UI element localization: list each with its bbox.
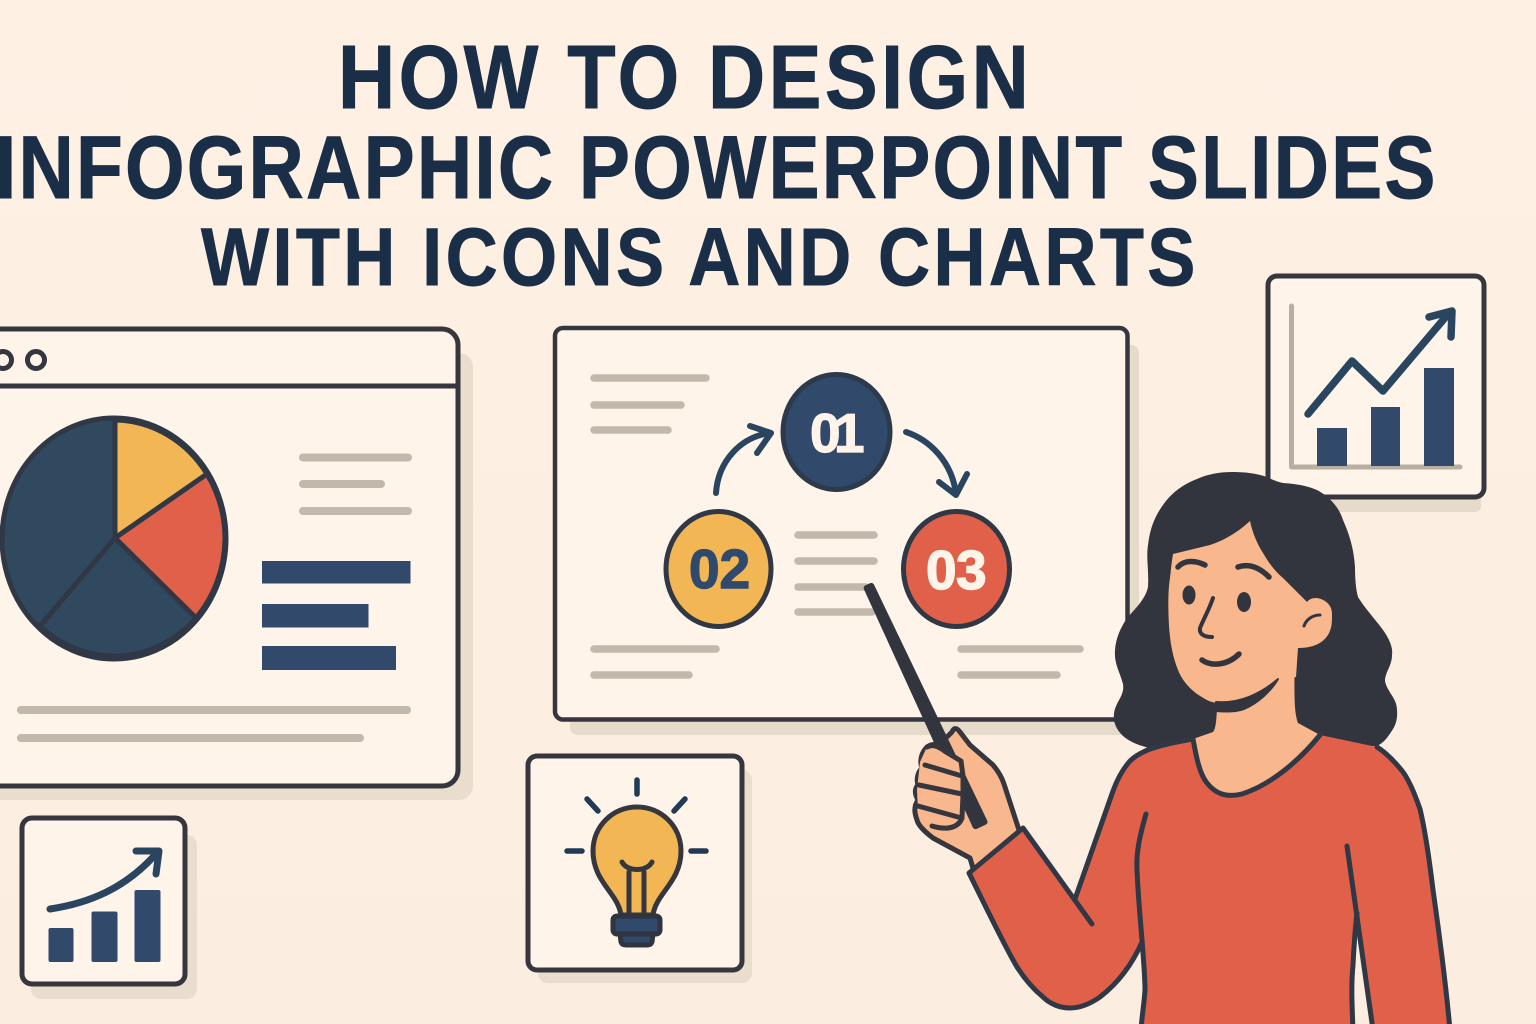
- text lines bottom left: [594, 649, 716, 675]
- growth arrow: [50, 851, 159, 909]
- sleeve outline: [969, 828, 1142, 1008]
- facial features: [1178, 561, 1320, 664]
- hand: [915, 729, 1025, 875]
- trend arrow: [1308, 311, 1452, 414]
- title line 1: HOW TO DESIGN: [338, 26, 1029, 127]
- step 03: 03: [926, 539, 987, 601]
- panel: browser window with pie chart: [0, 329, 473, 800]
- title line 2: INFOGRAPHIC POWERPOINT SLIDES: [0, 118, 1435, 217]
- panel: top right chart: [1268, 276, 1484, 512]
- chart bars: [1317, 368, 1454, 466]
- panel: light bulb: [528, 756, 752, 983]
- pointer stick: [867, 586, 984, 826]
- panel: central process slide: [555, 328, 1139, 735]
- chart axes: [1292, 306, 1460, 467]
- pie chart: [2, 418, 226, 659]
- bulb rays: [567, 780, 706, 851]
- text lines top left: [594, 378, 706, 430]
- horizontal bars: [262, 561, 410, 670]
- fingers: [917, 746, 963, 829]
- window dots: [0, 352, 44, 368]
- step 02: [666, 512, 771, 626]
- panel: small growth chart: [22, 818, 197, 999]
- caption lines: [21, 710, 407, 738]
- face: [1168, 521, 1332, 703]
- bulb base: [613, 916, 660, 934]
- step 02: 02: [689, 538, 750, 600]
- bars: [48, 890, 160, 962]
- bulb glass: [593, 807, 681, 915]
- clothing outlines: [1075, 735, 1450, 1024]
- text lines centre: [798, 535, 874, 612]
- legend text lines: [303, 458, 408, 511]
- chin shadow: [1216, 679, 1278, 712]
- hair: [1114, 472, 1397, 748]
- step 01: 01: [810, 402, 865, 464]
- presenter figure: [867, 472, 1450, 1024]
- step 01: [783, 374, 890, 490]
- arrow from 02 to 01: [716, 426, 771, 493]
- title line 3: WITH ICONS AND CHARTS: [201, 212, 1195, 303]
- torso and right arm: [1075, 735, 1450, 1024]
- text lines bottom right: [961, 649, 1080, 675]
- step 03: [904, 512, 1010, 626]
- title: [0, 26, 1435, 303]
- arrow from 01 to 03: [906, 432, 967, 495]
- neck and chest: [1193, 650, 1320, 795]
- filament: [622, 862, 652, 914]
- pointing arm sleeve: [969, 828, 1142, 1008]
